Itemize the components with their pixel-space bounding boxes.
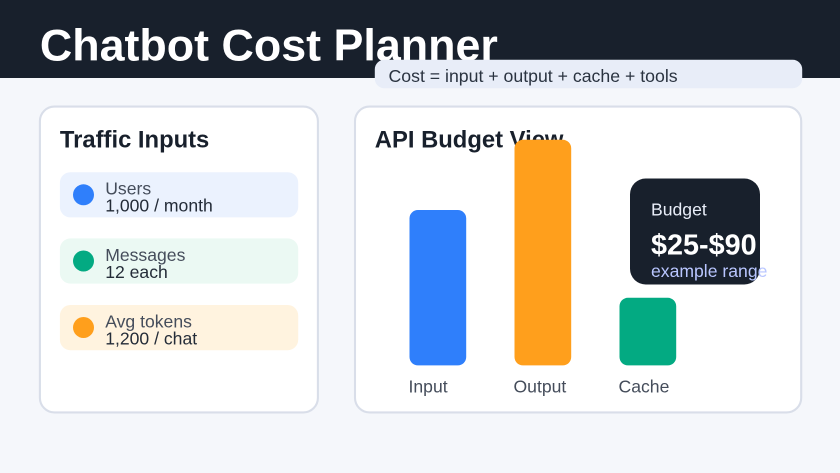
row: users: Users bbox=[105, 178, 151, 198]
callout: budget: Budget bbox=[651, 200, 707, 220]
callout: budget: example range bbox=[651, 261, 767, 281]
label: input: Input bbox=[408, 376, 448, 396]
bar: cache bbox=[620, 298, 676, 365]
row: avg tokens: 1,200 / chat bbox=[105, 328, 197, 348]
panel: traffic inputs bbox=[40, 107, 318, 412]
row: users bbox=[60, 172, 298, 217]
label: output: Output bbox=[514, 376, 566, 396]
row: avg tokens: Avg tokens bbox=[105, 312, 192, 332]
row: messages: Messages bbox=[105, 245, 186, 265]
row: messages: 12 each bbox=[105, 262, 168, 282]
bar chart bbox=[408, 140, 676, 397]
row: users: 1,000 / month bbox=[105, 195, 213, 215]
bar: output bbox=[514, 140, 571, 365]
formula pill bbox=[375, 60, 802, 88]
row: messages bbox=[60, 238, 298, 284]
bar: input bbox=[410, 210, 466, 365]
title: Chatbot Cost Planner bbox=[40, 20, 498, 70]
row: avg tokens bbox=[60, 305, 298, 350]
formula pill: Cost = input + output + cache + tools bbox=[388, 66, 678, 86]
heading: traffic inputs: Traffic Inputs bbox=[60, 126, 209, 154]
header band bbox=[0, 0, 840, 78]
callout: budget: $25-$90 bbox=[651, 230, 757, 262]
heading: api budget view: API Budget View bbox=[375, 126, 564, 154]
panel: api budget view bbox=[355, 107, 801, 412]
callout: budget bbox=[630, 178, 767, 284]
label: cache: Cache bbox=[618, 376, 669, 396]
